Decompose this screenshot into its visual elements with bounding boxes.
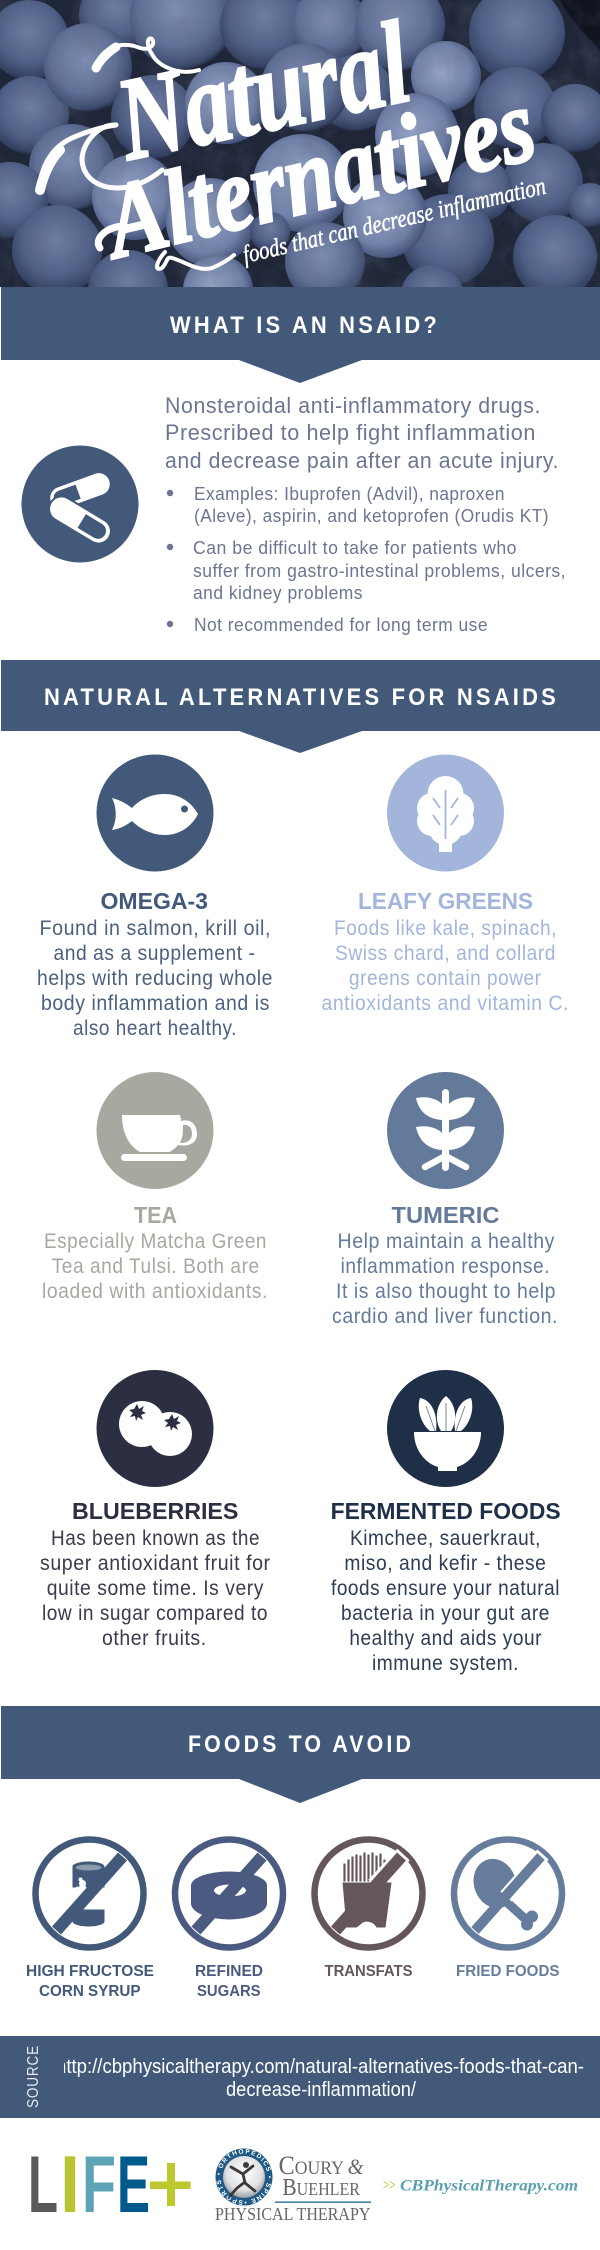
body: tumeric [332, 1230, 558, 1328]
body: tea: Tea and Tulsi. Both are [52, 1255, 260, 1278]
avoid: refined sugars [175, 1840, 283, 2000]
heading: what is an NSAID: WHAT IS AN NSAID? [170, 312, 440, 339]
icon: blueberries [119, 1401, 192, 1456]
body: blueberries: other fruits. [102, 1627, 207, 1650]
body: omega-3 [37, 917, 273, 1040]
body: omega-3: Found in salmon, krill oil, [40, 917, 271, 940]
label: HIGH FRUCTOSE [26, 1963, 154, 1980]
seal: SPORTS • ORTHOPEDICS • SPINE • [216, 2149, 271, 2205]
bullet list: NSAID facts [167, 483, 566, 635]
source url: decrease-inflammation/ [226, 2079, 416, 2101]
logo: LIFE+: L [28, 2140, 58, 2230]
body: blueberries: super antioxidant fruit for [40, 1552, 271, 1575]
heading: tea: TEA [134, 1202, 177, 1228]
banner: natural alternatives [1, 660, 600, 753]
wordmark: PHYSICAL THERAPY [215, 2204, 371, 2224]
bullet list: NSAID facts: Examples: Ibuprofen (Advil), naproxen [194, 483, 505, 504]
heading: blueberries: BLUEBERRIES [72, 1498, 238, 1524]
banner: foods to avoid [1, 1706, 600, 1803]
body: fermented foods [331, 1527, 560, 1675]
body: tumeric: cardio and liver function. [332, 1305, 558, 1328]
label [26, 1963, 154, 2000]
website link: >> [383, 2177, 395, 2194]
body: blueberries: Has been known as the [51, 1527, 260, 1550]
panel: tumeric [332, 1072, 558, 1328]
wordmark [215, 2151, 371, 2224]
body: blueberries [40, 1527, 271, 1650]
body: leafy greens: Swiss chard, and collard [335, 942, 556, 965]
heading: omega-3: OMEGA-3 [100, 888, 208, 914]
body: fermented foods: foods ensure your natural [331, 1577, 560, 1600]
body: omega-3: also heart healthy. [73, 1017, 237, 1040]
label: REFINED [195, 1963, 263, 1980]
body: tumeric: inflammation response. [341, 1255, 550, 1278]
corner shadow [560, 0, 600, 50]
label [195, 1963, 263, 2000]
logo: LIFE+: E [117, 2140, 150, 2230]
bullet list: NSAID facts: Can be difficult to take for patients who [193, 537, 517, 558]
logo: Coury and Buehler Physical Therapy [215, 2148, 371, 2224]
hero: blueberry photo with title [0, 0, 600, 287]
avoid: high fructose corn syrup [26, 1840, 154, 2000]
icon: sprig [416, 1089, 475, 1171]
banner: what is an NSAID [1, 287, 600, 383]
body: omega-3: body inflammation and is [41, 992, 270, 1015]
icon: fish [112, 794, 198, 835]
body: tumeric: It is also thought to help [336, 1280, 556, 1303]
heading: fermented foods: FERMENTED FOODS [331, 1498, 561, 1524]
title swashes [40, 38, 234, 269]
heading: tumeric: TUMERIC [392, 1202, 500, 1228]
label: TRANSFATS [324, 1963, 413, 1980]
source url [64, 2058, 584, 2096]
panel: fermented foods [331, 1370, 561, 1675]
body: leafy greens: antioxidants and vitamin C. [322, 992, 569, 1015]
panel: blueberries [40, 1370, 271, 1650]
text block: NSAID definition [165, 393, 559, 473]
body: blueberries: low in sugar compared to [42, 1602, 268, 1625]
website link: CBPhysicalTherapy.com [400, 2178, 578, 2194]
icon: pills [22, 446, 138, 562]
wordmark: BUEHLER [282, 2175, 360, 2201]
heading: foods to avoid: FOODS TO AVOID [188, 1731, 414, 1758]
heading: natural alternatives: NATURAL ALTERNATIVES FOR NSAIDS [44, 684, 559, 711]
wordmark: COURY & [279, 2151, 364, 2180]
icon: tea cup [121, 1115, 197, 1161]
bullet list: NSAID facts: and kidney problems [193, 582, 363, 603]
body: fermented foods: Kimchee, sauerkraut, [350, 1527, 541, 1550]
body: tea: Especially Matcha Green [44, 1230, 267, 1253]
label: FRIED FOODS [456, 1963, 560, 1980]
icon: bowl of greens [414, 1396, 481, 1471]
heading: leafy greens: LEAFY GREENS [358, 888, 533, 914]
text block: NSAID definition: Nonsteroidal anti-inflammatory drugs. [165, 393, 541, 418]
body: fermented foods: bacteria in your gut are [341, 1602, 550, 1625]
text block: NSAID definition: Prescribed to help fight inflammation [165, 420, 536, 445]
body: blueberries: quite some time. Is very [47, 1577, 264, 1600]
body: omega-3: and as a supplement - [54, 942, 256, 965]
logo: LIFE+: I [60, 2140, 80, 2230]
body: leafy greens: greens contain power [349, 967, 542, 990]
bullet list: NSAID facts: Not recommended for long term use [194, 614, 488, 635]
icon: leaf [417, 776, 474, 852]
avoid: fried foods [454, 1840, 562, 1980]
source label: SOURCE [25, 2045, 42, 2108]
logo: LIFE+: F [82, 2140, 116, 2230]
body: tea: loaded with antioxidants. [42, 1280, 268, 1303]
label: SUGARS [197, 1983, 261, 2000]
body: fermented foods: miso, and kefir - these [344, 1552, 546, 1575]
source banner [0, 2036, 600, 2118]
body: leafy greens [322, 917, 569, 1015]
icon: no fries [314, 1840, 422, 1948]
icon: no drumstick [454, 1840, 562, 1948]
panel: tea [42, 1072, 268, 1303]
body: fermented foods: immune system. [372, 1652, 519, 1675]
label: CORN SYRUP [39, 1983, 141, 2000]
icon: no donut [175, 1840, 283, 1948]
icon: no soda can [36, 1840, 144, 1948]
body: leafy greens: Foods like kale, spinach, [334, 917, 557, 940]
body: omega-3: helps with reducing whole [37, 967, 273, 990]
panel: leafy greens [322, 754, 569, 1015]
bullet list: NSAID facts: suffer from gastro-intestinal problems, ulcers, [193, 560, 566, 581]
text block: NSAID definition: and decrease pain after an acute injury. [165, 448, 559, 473]
body: tea [42, 1230, 268, 1303]
panel: omega-3 [37, 754, 273, 1040]
bullet list: NSAID facts: (Aleve), aspirin, and ketoprofen (Orudis KT) [194, 505, 549, 526]
body: fermented foods: healthy and aids your [349, 1627, 542, 1650]
logo: LIFE+ [28, 2140, 191, 2230]
body: tumeric: Help maintain a healthy [338, 1230, 555, 1253]
avoid: transfats [314, 1840, 422, 1980]
